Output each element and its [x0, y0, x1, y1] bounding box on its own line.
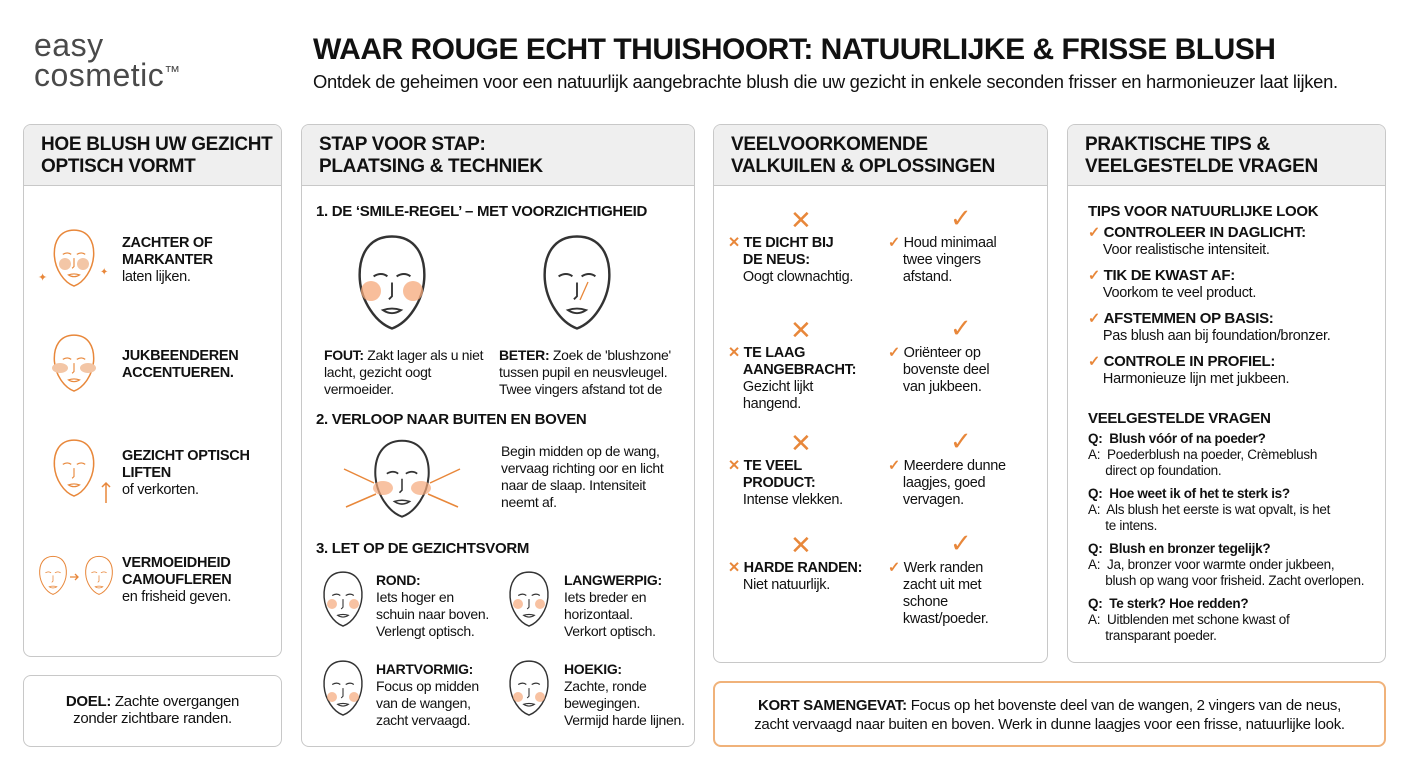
item 2: JUKBEENDEREN [122, 348, 238, 364]
panel: stap voor stap [301, 124, 695, 747]
shape: hartvormig: Focus op midden van de wangen, zacht vervaagd. [376, 678, 479, 728]
callout: kort samengevat [713, 681, 1386, 747]
callout: kort samengevat: KORT SAMENGEVAT: Focus op het bovenste deel van de wangen, 2 vingers van de neus, [758, 697, 1341, 714]
heading: PRAKTISCHE TIPS & [1085, 134, 1270, 155]
logo [34, 27, 181, 93]
title: WAAR ROUGE ECHT THUISHOORT: NATUURLIJKE & FRISSE BLUSH [313, 33, 1275, 66]
heading [1068, 125, 1385, 186]
tips: ✓ TIK DE KWAST AF: [1088, 267, 1235, 284]
tips: ✓ AFSTEMMEN OP BASIS: [1088, 310, 1273, 327]
row 4 [728, 528, 988, 627]
faq: transparant poeder. [1105, 628, 1217, 643]
callout: doel: zonder zichtbare randen. [73, 710, 232, 727]
callout: doel [23, 675, 282, 747]
heading [714, 125, 1047, 186]
item 1: MARKANTER [122, 252, 213, 268]
item 1: laten lijken. [122, 269, 191, 285]
step 3 heading: 3. LET OP DE GEZICHTSVORM [316, 540, 529, 557]
face: verloop [344, 440, 460, 518]
faq: A: Ja, bronzer voor warmte onder jukbeen, [1088, 557, 1334, 572]
row 3: PRODUCT: [743, 475, 815, 491]
faq: VEELGESTELDE VRAGEN [1088, 410, 1271, 427]
tips: ✓ CONTROLEER IN DAGLICHT: [1088, 224, 1306, 241]
shape: hoekig: HOEKIG: [564, 661, 622, 677]
tips: TIPS VOOR NATUURLIJKE LOOK [1088, 203, 1318, 220]
row 1: Oogt clownachtig. [743, 269, 853, 285]
faq: A: Poederblush na poeder, Crèmeblush [1088, 447, 1317, 462]
icon: face lift [54, 439, 110, 503]
row 4: Niet natuurlijk. [743, 577, 830, 593]
icon: tired to fresh [39, 556, 113, 595]
item 1: ✦ [38, 272, 47, 284]
row 4: ✓ [950, 528, 972, 558]
text verloop: Begin midden op de wang, vervaag richting oor en licht naar de slaap. Intensiteit neemt af. [501, 443, 664, 510]
faq: Q: Te sterk? Hoe redden? [1088, 596, 1248, 611]
item 3: LIFTEN [122, 465, 171, 481]
row 1: ✕ [790, 205, 812, 235]
callout: doel: DOEL: Zachte overgangen [66, 693, 239, 710]
icon: face soft [38, 229, 108, 287]
shape: hoekig: Zachte, ronde bewegingen. [564, 678, 646, 711]
shape: rond: ROND: [376, 572, 420, 588]
callout: kort samengevat: zacht vervaagd naar buiten en boven. Werk in dunne laagjes voor een frisse, natuurlijke look. [754, 716, 1345, 733]
heading: VEELGESTELDE VRAGEN [1085, 156, 1318, 177]
shape: hartvormig: HARTVORMIG: [376, 661, 473, 677]
row 1: twee vingers [903, 252, 981, 268]
row 3: ✓ Meerdere dunne [888, 458, 1006, 474]
row 1 [728, 203, 996, 285]
heading: STAP VOOR STAP: [319, 134, 486, 155]
faq: Q: Hoe weet ik of het te sterk is? [1088, 486, 1290, 501]
row 1: ✓ [950, 203, 972, 233]
step 2 heading: 2. VERLOOP NAAR BUITEN EN BOVEN [316, 411, 586, 428]
item 1: ZACHTER OF [122, 235, 212, 251]
panel: valkuilen [713, 124, 1048, 663]
panel: tips & faq [1067, 124, 1386, 663]
row 2: ✓ Oriënteer op [888, 345, 981, 361]
row 3: ✕ [790, 428, 812, 458]
item 3 [54, 439, 250, 503]
faq: blush op wang voor frisheid. Zacht overlopen. [1105, 573, 1364, 588]
heading: OPTISCH VORMT [41, 156, 195, 177]
faq: A: Uitblenden met schone kwast of [1088, 612, 1289, 627]
faq [1088, 410, 1364, 643]
shape: langwerpig: Iets breder en horizontaal. Verkort optisch. [564, 589, 656, 639]
row 3 [728, 426, 1006, 508]
item 1 [38, 229, 213, 287]
heading: VALKUILEN & OPLOSSINGEN [731, 156, 995, 177]
shape: langwerpig: LANGWERPIG: [564, 572, 662, 588]
item 3: of verkorten. [122, 482, 199, 498]
shape: hartvormig [323, 660, 479, 728]
heading [302, 125, 694, 186]
row 1: ✓ Houd minimaal [888, 235, 996, 251]
item 4: en frisheid geven. [122, 589, 231, 605]
row 4: ✕ [790, 530, 812, 560]
faq: direct op foundation. [1105, 463, 1221, 478]
faq: Q: Blush vóór of na poeder? [1088, 431, 1266, 446]
row 2: hangend. [743, 396, 801, 412]
item 4: CAMOUFLEREN [122, 572, 231, 588]
row 1: DE NEUS: [743, 252, 810, 268]
shape: langwerpig [509, 571, 662, 639]
row 3: Intense vlekken. [743, 492, 843, 508]
tips: Harmonieuze lijn met jukbeen. [1103, 371, 1289, 387]
row 4: ✕ HARDE RANDEN: [728, 560, 862, 576]
faq: A: Als blush het eerste is wat opvalt, is het [1088, 502, 1330, 517]
row 2: ✕ [790, 315, 812, 345]
row 3: ✕ TE VEEL [728, 458, 802, 474]
row 2 [728, 313, 989, 412]
text fout: FOUT: Zakt lager als u niet lacht, gezicht oogt vermoeider. [324, 347, 483, 397]
row 2: ✕ TE LAAG [728, 345, 805, 361]
shape: hoekig [509, 660, 685, 728]
row 2: AANGEBRACHT: [743, 362, 856, 378]
heading [24, 125, 281, 186]
row 2: Gezicht lijkt [743, 379, 813, 395]
tips [1088, 203, 1330, 387]
row 4: schone [903, 594, 948, 610]
row 3: laagjes, goed [903, 475, 985, 491]
row 2: bovenste deel [903, 362, 989, 378]
row 3: ✓ [950, 426, 972, 456]
subtitle: Ontdek de geheimen voor een natuurlijk aangebrachte blush die uw gezicht in enkele seconden frisser en harmonieuzer laat lijken. [313, 71, 1338, 92]
item 4: VERMOEIDHEID [122, 555, 230, 571]
step 1 heading: 1. DE ‘SMILE-REGEL’ – MET VOORZICHTIGHEID [316, 203, 647, 220]
shape: hoekig: Vermijd harde lijnen. [564, 712, 685, 728]
tips: ✓ CONTROLE IN PROFIEL: [1088, 353, 1275, 370]
shape: rond: Iets hoger en schuin naar boven. Verlengt optisch. [376, 589, 489, 639]
item 4 [39, 555, 231, 605]
row 3: vervagen. [903, 492, 964, 508]
shape: rond [323, 571, 489, 639]
logo: easy [34, 27, 104, 63]
item 3: GEZICHT OPTISCH [122, 448, 250, 464]
item 2: ACCENTUEREN. [122, 365, 234, 381]
heading: HOE BLUSH UW GEZICHT [41, 134, 272, 155]
item 2 [52, 334, 238, 392]
text beter: BETER: Zoek de 'blushzone' tussen pupil en neusvleugel. Twee vingers afstand tot de [499, 347, 671, 397]
face: beter [543, 235, 611, 330]
row 4: ✓ Werk randen [888, 560, 983, 576]
heading: PLAATSING & TECHNIEK [319, 156, 543, 177]
row 1: afstand. [903, 269, 952, 285]
row 2: ✓ [950, 313, 972, 343]
row 1: ✕ TE DICHT BIJ [728, 235, 833, 251]
panel: hoe blush vormt [23, 124, 282, 657]
row 2: van jukbeen. [903, 379, 982, 395]
icon: face cheekbones [52, 334, 96, 392]
tips: Voorkom te veel product. [1103, 285, 1256, 301]
row 4: zacht uit met [903, 577, 981, 593]
heading: VEELVOORKOMENDE [731, 134, 928, 155]
tips: Pas blush aan bij foundation/bronzer. [1103, 328, 1330, 344]
item 1: ✦ [100, 267, 108, 278]
tips: Voor realistische intensiteit. [1103, 242, 1270, 258]
row 4: kwast/poeder. [903, 611, 988, 627]
faq: te intens. [1105, 518, 1157, 533]
logo: cosmetic™ [34, 57, 181, 93]
faq: Q: Blush en bronzer tegelijk? [1088, 541, 1270, 556]
face: fout [358, 235, 426, 330]
